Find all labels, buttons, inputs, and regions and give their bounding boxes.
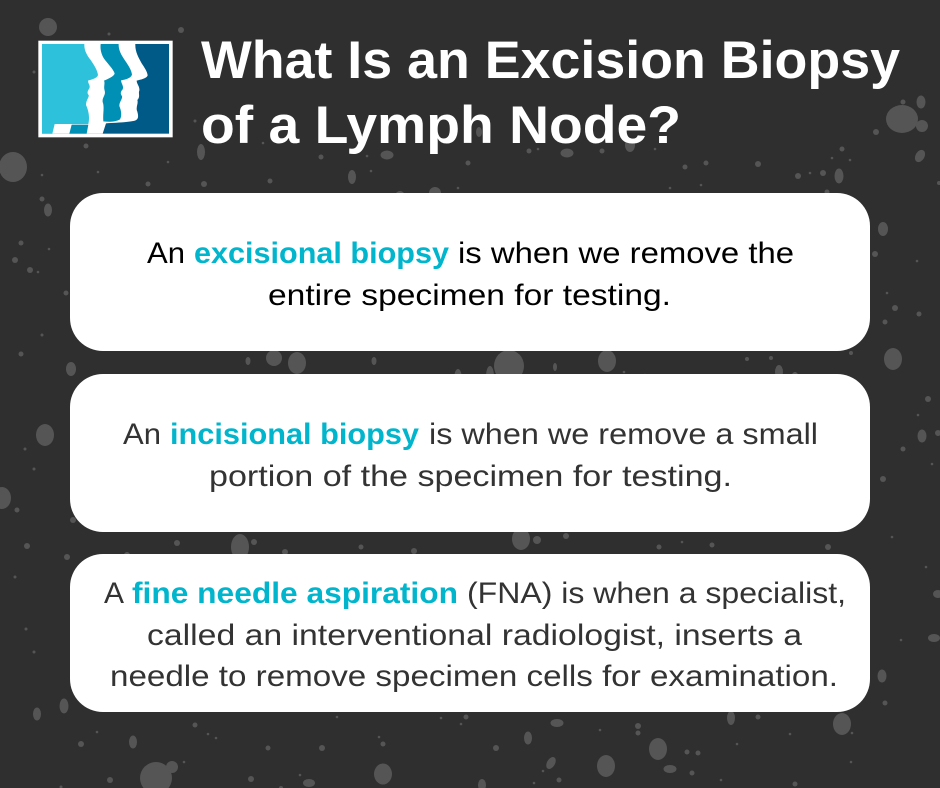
- panel: incisional biopsy: incisional biopsy: [170, 418, 419, 451]
- panel: incisional biopsy: An: [123, 418, 161, 451]
- title: of a Lymph Node?: [201, 96, 681, 155]
- panel: incisional biopsy: is when we remove a small: [429, 418, 818, 451]
- panel: fine needle aspiration: called an interventional radiologist, inserts a: [147, 619, 802, 652]
- title: What Is an Excision Biopsy: [201, 31, 901, 90]
- panel: excisional biopsy: [70, 193, 870, 351]
- panel: excisional biopsy: excisional biopsy: [194, 237, 449, 270]
- logo: three face profiles: [38, 41, 173, 137]
- title: [201, 31, 901, 155]
- panel: fine needle aspiration: needle to remove specimen cells for examination.: [110, 660, 838, 693]
- panel: fine needle aspiration: fine needle aspiration: [132, 577, 458, 610]
- panel: incisional biopsy: [70, 374, 870, 532]
- panel: fine needle aspiration: A: [104, 577, 124, 610]
- panel: excisional biopsy: entire specimen for testing.: [268, 279, 671, 312]
- panel: fine needle aspiration: [70, 554, 870, 712]
- panel: fine needle aspiration: (FNA) is when a specialist,: [467, 577, 846, 610]
- panel: excisional biopsy: is when we remove the: [458, 237, 794, 270]
- panel: excisional biopsy: An: [147, 237, 185, 270]
- panel: incisional biopsy: portion of the specimen for testing.: [209, 460, 732, 493]
